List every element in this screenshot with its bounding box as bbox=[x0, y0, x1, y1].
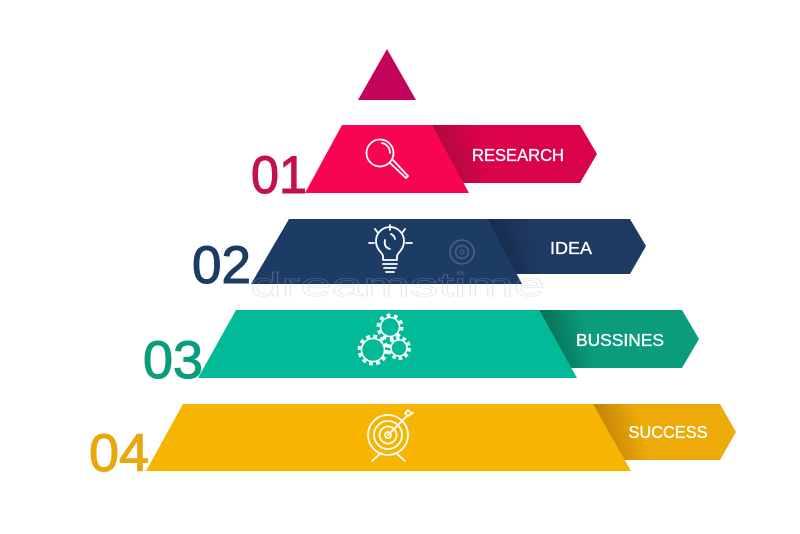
watermark: dreamstime bbox=[250, 266, 545, 303]
band: idea bbox=[251, 219, 522, 284]
tier 4: success bbox=[89, 404, 736, 483]
watermark bbox=[250, 240, 545, 303]
label: research: RESEARCH bbox=[472, 145, 564, 165]
icon: gears bbox=[360, 316, 409, 364]
tier 1: research bbox=[251, 125, 597, 205]
arrow: bussines bbox=[539, 310, 699, 368]
pyramid top triangle bbox=[358, 49, 416, 100]
label: success: SUCCESS bbox=[628, 422, 708, 442]
band: success bbox=[146, 404, 631, 471]
tier 2: idea bbox=[192, 219, 646, 295]
icon: target bbox=[368, 410, 413, 461]
number 04: 04 bbox=[89, 424, 149, 483]
tier 3: business bbox=[143, 310, 699, 390]
icon: magnifying glass bbox=[366, 140, 408, 178]
number 03: 03 bbox=[143, 331, 203, 390]
arrow: success bbox=[593, 404, 736, 460]
band: bussines bbox=[198, 310, 577, 378]
label: bussines: BUSSINES bbox=[576, 330, 664, 350]
number 01: 01 bbox=[251, 146, 307, 205]
icon: light bulb bbox=[369, 225, 412, 272]
arrow: idea bbox=[487, 219, 646, 274]
band: research bbox=[305, 125, 469, 193]
arrow: research bbox=[432, 125, 597, 183]
number 02: 02 bbox=[192, 236, 251, 295]
label: idea: IDEA bbox=[550, 238, 592, 258]
